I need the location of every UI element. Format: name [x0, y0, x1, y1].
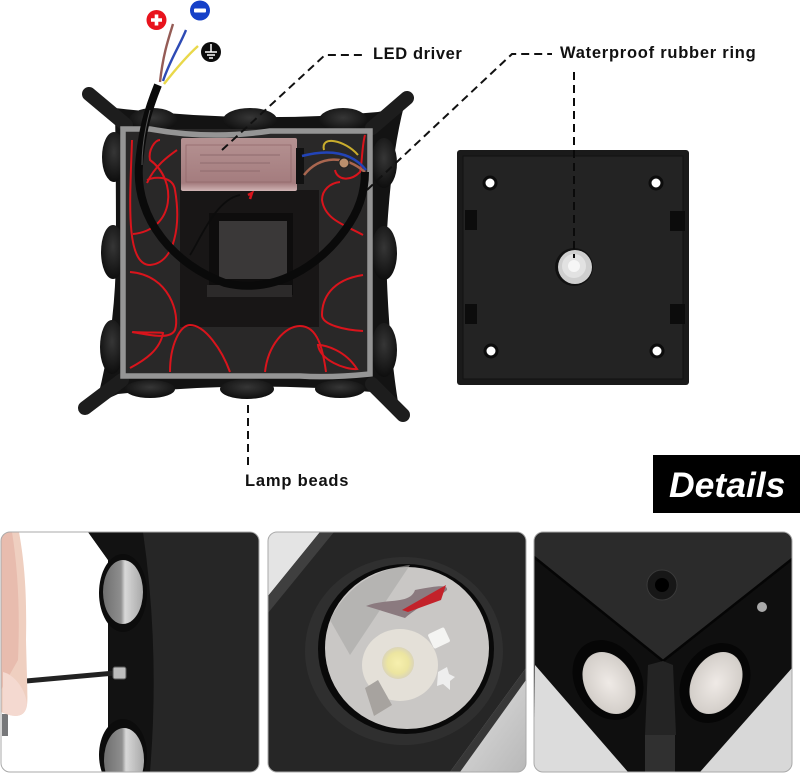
- panel: back mounting plate: [457, 150, 689, 385]
- clips: [465, 210, 685, 324]
- lens housing: [305, 557, 503, 745]
- icon: ground terminal: [201, 42, 221, 62]
- LED driver module: [181, 138, 304, 191]
- hex key: [2, 667, 126, 736]
- input cable: [139, 85, 365, 286]
- power lead wires: [160, 24, 198, 84]
- lens interior: [325, 567, 489, 729]
- label: waterproof rubber ring: Waterproof rubber ring: [560, 44, 756, 62]
- left lens: [572, 640, 644, 720]
- driver output wires and screw: [190, 141, 366, 255]
- corner mounting arms: [85, 94, 407, 415]
- red lamp wires: [130, 135, 365, 372]
- waterproof rubber ring seal: [123, 129, 370, 377]
- lower lens: [99, 727, 144, 772]
- upper lens: [99, 560, 143, 624]
- right lens: [680, 643, 750, 723]
- waterproof rubber ring: [555, 248, 593, 286]
- leader line: lamp beads: [247, 405, 249, 466]
- screw holes: [484, 177, 663, 357]
- heading: Details: Details: [669, 465, 785, 505]
- leader line: rubber ring: [367, 54, 552, 190]
- leader line: LED driver: [222, 55, 365, 150]
- icon: negative terminal: [190, 0, 210, 20]
- background: [534, 665, 628, 772]
- photo panel: hex key and lens: [1, 532, 259, 774]
- diagram: open lamp housing: [85, 24, 407, 415]
- heading: Details: [653, 455, 800, 513]
- LED emitter: [362, 627, 455, 716]
- lamp beads: domes around housing: [100, 108, 397, 399]
- corner arm: [645, 661, 676, 735]
- label: LED driver: LED driver: [373, 45, 462, 63]
- lamp body: [88, 532, 259, 772]
- top face: [534, 532, 792, 661]
- photo panel outlines: [1, 532, 792, 772]
- housing body: [96, 106, 404, 404]
- small marking: [757, 602, 767, 612]
- icon: positive terminal: [146, 10, 166, 30]
- central mounting plate: [180, 190, 319, 327]
- finger: [1, 532, 27, 716]
- screw hole: [647, 570, 677, 600]
- photo panel: corner with two lenses: [534, 532, 792, 772]
- housing interior: [122, 129, 370, 375]
- label: lamp beads: Lamp beads: [245, 472, 349, 490]
- photo panel: lens close-up: [268, 532, 526, 772]
- leader line: back plate ring: [573, 72, 575, 258]
